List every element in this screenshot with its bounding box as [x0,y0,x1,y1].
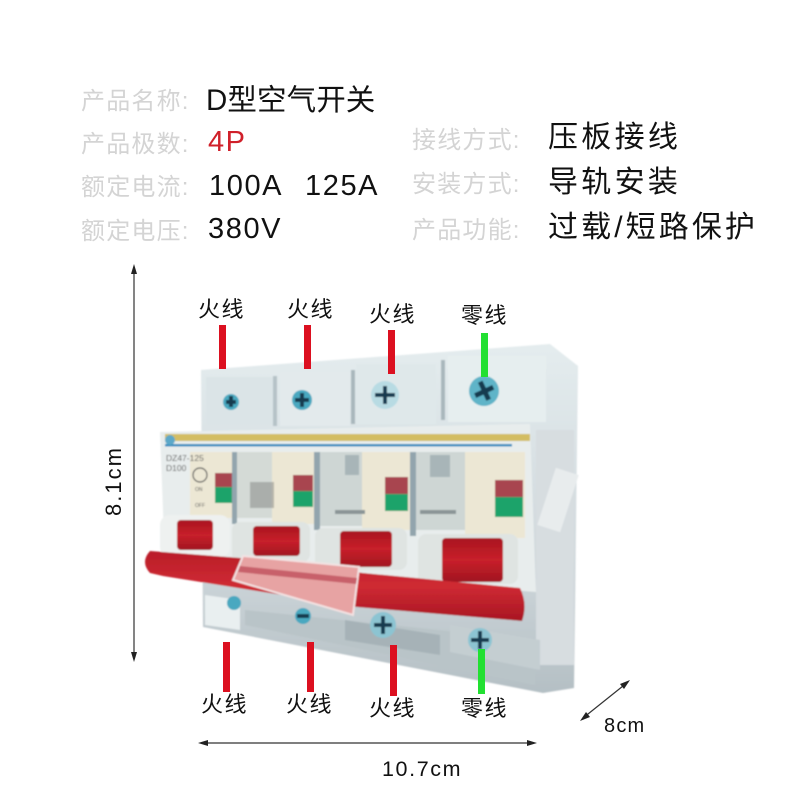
wire markers top [219,325,488,377]
spec: rated current: 额定电流: [81,174,190,201]
model label print: D100 [166,463,187,473]
wire labels bottom [201,692,508,721]
wire labels bottom: 零线 [461,696,508,721]
spec: wiring method [412,121,681,154]
clear rear housing [201,344,578,693]
breaker photo illustration [145,344,579,693]
specification text [81,84,758,245]
spec: poles: 4P [208,126,246,158]
model label print: OFF [195,503,205,509]
model label print: DZ47-125 [166,453,204,463]
lower terminal mottling [205,595,540,685]
width dimension arrow [198,740,537,746]
spec: rated voltage: 380V [208,213,282,245]
spec: product name: 产品名称: [81,88,190,115]
wire labels bottom: 火线 [286,692,333,717]
depth label: 8cm [604,715,645,737]
spec: product name: D型空气开关 [206,84,375,117]
spec: rated current [81,170,379,202]
wire labels top: 火线 [198,297,245,322]
wire markers bottom [223,642,485,696]
spec: rated voltage [81,213,282,245]
depth dimension arrow [580,680,630,721]
front clear panel [160,424,536,592]
wire labels bottom: 火线 [369,696,416,721]
spec: rated current: 100A [209,170,283,202]
spec: wiring method: 压板接线 [548,121,681,154]
model label print: ON [195,487,203,493]
width label: 10.7cm [382,757,462,781]
spec: product name [81,84,375,117]
spec: poles [81,126,246,158]
bottom terminal screws [227,596,492,652]
wire labels top: 零线 [461,303,508,328]
wire labels top: 火线 [369,302,416,327]
brass rail and blue line [165,434,530,446]
wire labels bottom: 火线 [201,692,248,717]
clear handle sleeve [233,556,359,615]
height label: 8.1cm [101,446,126,516]
spec: wiring method: 接线方式: [412,127,521,154]
sleeve highlight bands [238,566,357,584]
spec: product function: 产品功能: [412,217,521,244]
top terminal section detail [206,356,579,665]
wire labels top [198,297,508,328]
red and green status flags [215,473,523,517]
spec: poles: 产品极数: [81,131,190,158]
height dimension arrow [131,264,137,662]
model label print [166,453,274,509]
spec: rated current: 125A [305,170,379,202]
spec: product function: 过载/短路保护 [548,211,758,244]
metal mechanism gaps [232,452,465,536]
spec: rated voltage: 额定电压: [81,218,190,245]
spec: product function [412,211,758,244]
top terminal screws [223,376,499,410]
spec: installation method: 导轨安装 [548,166,681,199]
red handle bar [145,551,525,621]
spec: installation method: 安装方式: [412,171,521,198]
cream breaker modules [190,452,525,538]
spec: installation method [412,166,681,199]
red rollers [160,515,518,584]
wire labels top: 火线 [287,297,334,322]
